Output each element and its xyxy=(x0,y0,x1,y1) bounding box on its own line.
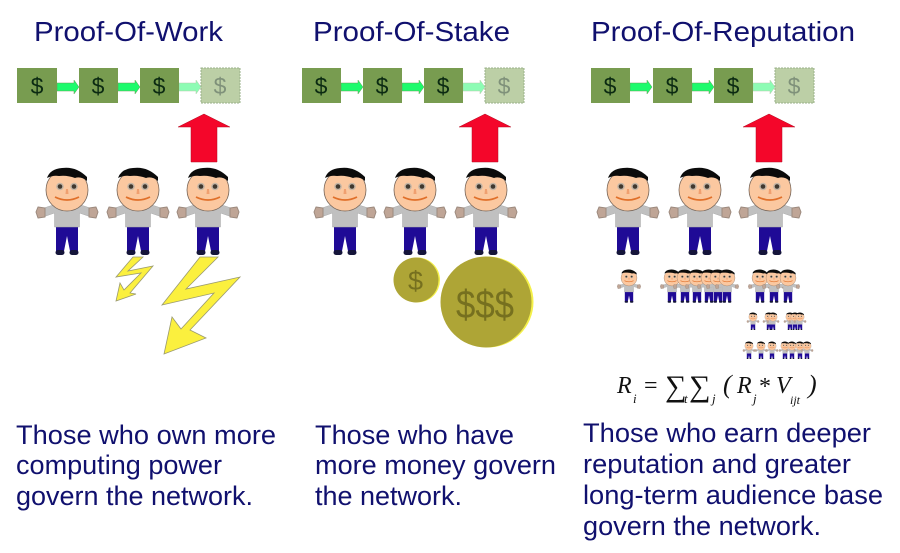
formula: = xyxy=(644,373,658,399)
description: Those who own more xyxy=(16,420,276,450)
formula: V xyxy=(776,373,793,399)
panel: proof of reputation xyxy=(583,16,883,541)
description: govern the network. xyxy=(583,511,821,541)
block chain: $ xyxy=(92,73,105,99)
block chain: $ xyxy=(666,73,679,99)
formula: i xyxy=(633,391,637,406)
panel: proof of work xyxy=(16,16,276,511)
formula: j xyxy=(751,391,757,406)
formula: t xyxy=(684,391,688,406)
title: proof of stake: Proof-Of-Stake xyxy=(313,16,510,47)
description: the network. xyxy=(315,481,462,511)
icon: large lightning bolt xyxy=(162,257,240,354)
icon: red arrow xyxy=(178,114,230,162)
audience groups, second level xyxy=(747,313,806,330)
description: Those who earn deeper xyxy=(583,418,871,448)
icon: red arrow xyxy=(459,114,511,162)
description: Those who have xyxy=(315,420,514,450)
icon: red arrow xyxy=(743,114,795,162)
miners xyxy=(36,168,239,255)
icon: small coin: $ xyxy=(408,266,423,296)
block chain: $ xyxy=(315,73,328,99)
block chain: $ xyxy=(498,73,511,99)
block chain: $ xyxy=(376,73,389,99)
block chain: $ xyxy=(153,73,166,99)
block chain xyxy=(302,68,524,103)
formula: R xyxy=(616,373,632,399)
formula: ∑ xyxy=(689,370,710,403)
block chain xyxy=(17,68,240,103)
formula: * xyxy=(759,374,771,400)
description xyxy=(16,420,276,511)
block chain: $ xyxy=(604,73,617,99)
panel: proof of stake xyxy=(302,16,556,511)
formula: ijt xyxy=(790,393,801,407)
description: computing power xyxy=(16,450,222,480)
title: proof of work: Proof-Of-Work xyxy=(34,16,224,47)
formula: ∑ xyxy=(665,370,686,403)
icon: large coin: $$$ xyxy=(456,283,514,327)
block chain: $ xyxy=(788,73,801,99)
description: reputation and greater xyxy=(583,449,851,479)
block chain: $ xyxy=(727,73,740,99)
description: more money govern xyxy=(315,450,556,480)
audience groups, first level xyxy=(617,270,800,303)
description: govern the network. xyxy=(16,481,253,511)
block chain: $ xyxy=(214,73,227,99)
formula: ) xyxy=(806,370,817,399)
formula: j xyxy=(710,391,716,406)
block chain: $ xyxy=(31,73,44,99)
icon: small lightning bolt xyxy=(116,257,153,301)
validators xyxy=(314,168,517,255)
description: long-term audience base xyxy=(583,480,883,510)
formula: R xyxy=(736,373,752,399)
title: proof of reputation: Proof-Of-Reputation xyxy=(591,16,855,47)
icon: small coin xyxy=(394,258,440,302)
formula: ( xyxy=(723,370,733,399)
reputation holders xyxy=(597,168,801,255)
description xyxy=(315,420,556,511)
audience groups, third level xyxy=(743,342,813,359)
icon: large coin xyxy=(440,256,534,348)
description xyxy=(583,418,883,541)
formula xyxy=(616,370,817,407)
block chain: $ xyxy=(437,73,450,99)
block chain xyxy=(591,68,814,103)
